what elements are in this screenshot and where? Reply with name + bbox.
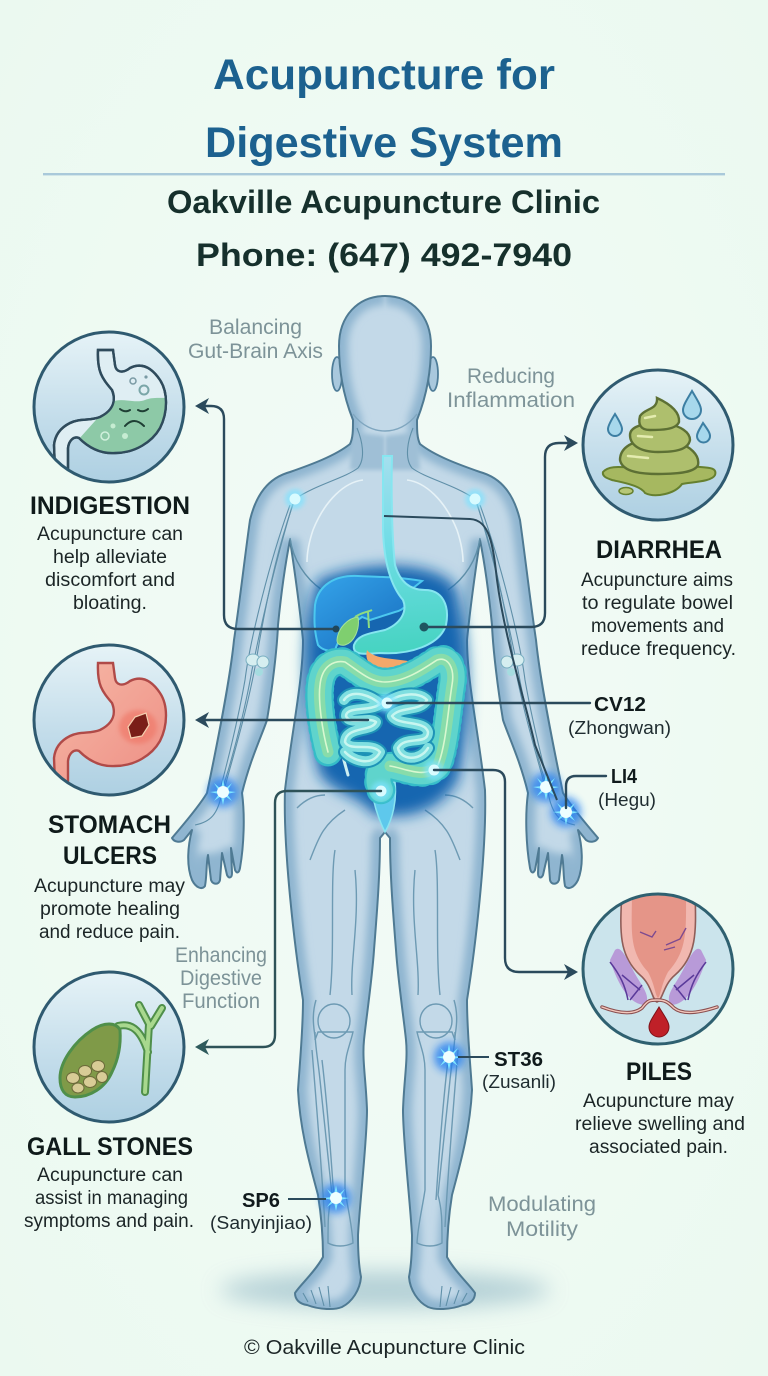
label: reducing inflammation	[447, 365, 575, 412]
text: piles: Acupuncture may	[583, 1091, 735, 1112]
connector arrow: gall stones	[195, 791, 381, 1055]
text: diarrhea	[581, 570, 736, 660]
text: indigestion: help alleviate	[53, 547, 167, 568]
acupoint glow: SP6	[321, 1183, 351, 1213]
point label: SP6	[210, 1190, 312, 1233]
heading: piles: PILES	[626, 1058, 692, 1086]
text: stomach ulcers: and reduce pain.	[39, 922, 180, 943]
label: enhancing digestive function: Enhancing	[175, 944, 267, 967]
footer: © Oakville Acupuncture Clinic	[244, 1337, 525, 1359]
label: modulating motility: Motility	[506, 1218, 579, 1241]
connector arrow: indigestion	[195, 398, 340, 632]
text: indigestion	[37, 524, 183, 614]
heading: diarrhea: DIARRHEA	[596, 536, 722, 564]
face and bubbles	[101, 378, 148, 440]
point label: CV12	[568, 694, 671, 738]
leader line: SP6	[288, 1198, 326, 1200]
title: Acupuncture for	[213, 51, 555, 99]
heading: gall stones: GALL STONES	[27, 1133, 193, 1161]
panel: diarrhea icon	[583, 370, 733, 520]
point label: ST36: (Zusanli)	[482, 1072, 556, 1092]
text: gall stones: Acupuncture can	[37, 1165, 183, 1186]
clinic name and phone	[167, 184, 600, 273]
label: reducing inflammation: Reducing	[467, 365, 555, 388]
connector arrow: stomach ulcers	[195, 712, 368, 728]
text: diarrhea: reduce frequency.	[581, 639, 736, 660]
human body figure	[172, 296, 598, 1309]
point label: CV12: (Zhongwan)	[568, 718, 671, 738]
gallbladder	[337, 617, 358, 645]
ground shadow	[220, 1271, 550, 1309]
heading: stomach ulcers: ULCERS	[63, 842, 157, 870]
liver	[314, 576, 422, 651]
point label: SP6: SP6	[242, 1190, 280, 1212]
text: indigestion: Acupuncture can	[37, 524, 183, 545]
text: stomach ulcers	[34, 876, 186, 943]
small intestine	[344, 694, 428, 761]
text: indigestion: bloating.	[73, 593, 147, 614]
connector arrow: diarrhea	[420, 435, 578, 632]
label: balancing gut-brain axis	[188, 316, 323, 363]
bile ducts	[355, 610, 372, 628]
point label: ST36: ST36	[494, 1049, 543, 1071]
acupoint glow: wrist left	[208, 777, 238, 807]
panel: stomach ulcers icon	[34, 645, 184, 795]
text: piles: associated pain.	[589, 1137, 728, 1158]
connector arrow: piles	[434, 770, 578, 980]
acupoint glow: LI4	[551, 797, 581, 827]
label: balancing gut-brain axis: Gut-Brain Axis	[188, 340, 323, 363]
panel: gall stones icon	[34, 972, 184, 1122]
text: stomach ulcers: Acupuncture may	[34, 876, 186, 897]
digestive organs	[306, 456, 468, 832]
text: gall stones: symptoms and pain.	[24, 1211, 194, 1232]
ulcer	[119, 710, 157, 744]
label: reducing inflammation: Inflammation	[447, 389, 575, 412]
heading: stomach ulcers: STOMACH	[48, 811, 171, 839]
heading: indigestion: INDIGESTION	[30, 492, 190, 520]
rectum	[372, 782, 396, 832]
leader line: CV12	[387, 702, 590, 704]
stomach and oesophagus	[354, 456, 447, 654]
point label: SP6: (Sanyinjiao)	[210, 1213, 312, 1233]
point label: LI4: (Hegu)	[598, 790, 656, 810]
leader line: LI4 path	[384, 516, 557, 800]
label: enhancing digestive function: Function	[182, 990, 260, 1013]
label: balancing gut-brain axis: Balancing	[209, 316, 302, 339]
title: Digestive System	[205, 119, 563, 167]
clinic name and phone: Oakville Acupuncture Clinic	[167, 184, 600, 220]
point label: LI4	[598, 766, 656, 810]
pancreas	[366, 650, 413, 670]
label: modulating motility: Modulating	[488, 1193, 596, 1216]
panel: indigestion icon	[34, 332, 184, 482]
text: stomach ulcers: promote healing	[40, 899, 180, 920]
clinic name and phone: Phone: (647) 492-7940	[196, 237, 572, 273]
point label: CV12: CV12	[594, 694, 646, 716]
point label: LI4: LI4	[611, 766, 638, 788]
leader line: LI4 label	[566, 776, 606, 808]
heading: stomach ulcers	[48, 811, 171, 870]
text: gall stones: assist in managing	[35, 1188, 188, 1209]
highlights and drip	[628, 416, 655, 458]
blood drop	[649, 1007, 669, 1037]
water drops	[608, 391, 710, 443]
title	[205, 51, 563, 167]
text: piles	[575, 1091, 745, 1158]
text: diarrhea: Acupuncture aims	[581, 570, 733, 591]
stones	[66, 1060, 108, 1093]
label: modulating motility	[488, 1193, 596, 1241]
label: enhancing digestive function	[175, 944, 267, 1013]
panel: piles icon	[583, 890, 733, 1044]
text: diarrhea: to regulate bowel	[582, 593, 733, 614]
text: piles: relieve swelling and	[575, 1114, 745, 1135]
text: diarrhea: movements and	[591, 616, 724, 637]
point label: ST36	[482, 1049, 556, 1092]
acupoint glow: ST36	[434, 1042, 464, 1072]
text: gall stones	[24, 1165, 194, 1232]
large intestine	[319, 659, 453, 790]
leader line: ST36	[458, 1056, 489, 1058]
acupoint glow: wrist right	[531, 772, 561, 802]
acupoint nodes	[285, 489, 485, 801]
text: indigestion: discomfort and	[45, 570, 175, 591]
label: enhancing digestive function: Digestive	[180, 967, 262, 990]
